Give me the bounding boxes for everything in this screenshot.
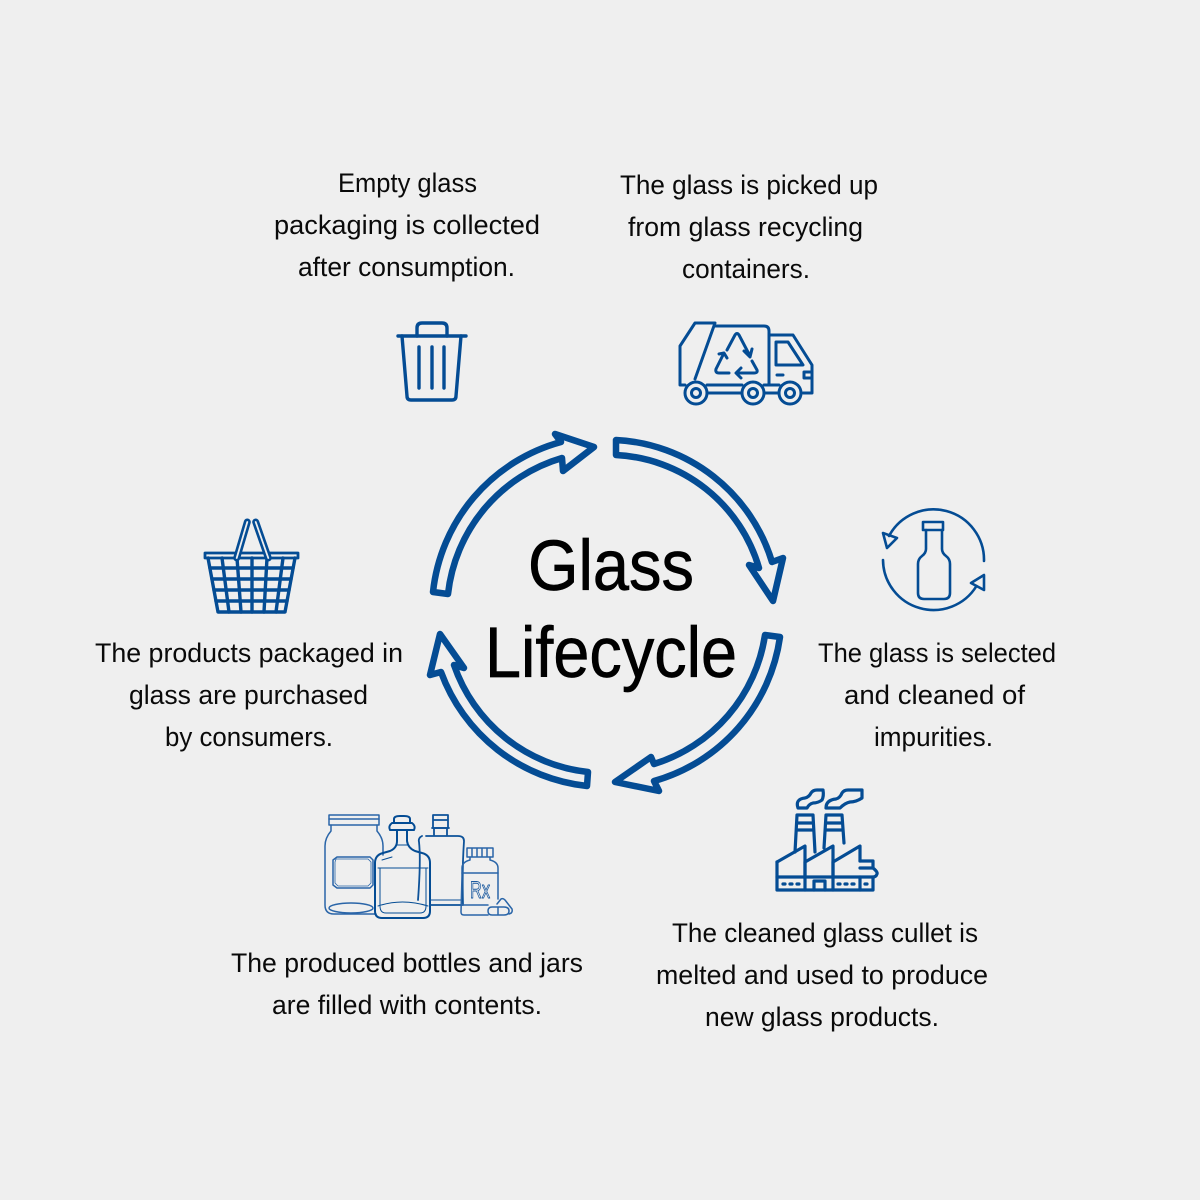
icon: jars and bottles [325, 815, 512, 918]
jar [325, 815, 383, 914]
title [485, 527, 737, 693]
icon: factory [777, 790, 877, 890]
text: step 2 pick up: The glass is picked up [620, 170, 878, 200]
text: step 5 filled: are filled with contents. [272, 990, 542, 1020]
arrow: bottom to left [430, 634, 588, 786]
text: step 1 collected: after consumption. [298, 252, 515, 282]
text: step 2 pick up [620, 170, 878, 284]
text: step 4 melted: The cleaned glass cullet is [672, 918, 978, 948]
icon: recycling truck [680, 323, 812, 404]
text: step 4 melted [656, 918, 988, 1032]
cycle arrows [430, 434, 783, 791]
icon: bottle in cycle [883, 509, 984, 610]
text: step 2 pick up: containers. [682, 254, 810, 284]
title: Lifecycle [485, 614, 737, 693]
arrow: left to top [433, 434, 594, 594]
text: step 3 selected: The glass is selected [818, 638, 1056, 668]
text: step 5 filled [231, 948, 583, 1020]
pill bottle [461, 848, 512, 915]
text: step 3 selected: impurities. [874, 722, 993, 752]
text: step 1 collected: packaging is collected [274, 210, 540, 240]
arrow: right to bottom [615, 635, 780, 791]
text: step 1 collected [274, 168, 540, 282]
label: Rx: Rx [470, 877, 490, 904]
text: step 4 melted: melted and used to produce [656, 960, 988, 990]
text: step 2 pick up: from glass recycling [628, 212, 863, 242]
text: step 6 purchased: by consumers. [165, 722, 333, 752]
text: step 6 purchased: The products packaged in [95, 638, 403, 668]
text: step 6 purchased [95, 638, 403, 752]
arrow: top to right [616, 440, 783, 601]
title: Glass [528, 527, 694, 606]
flat bottle [418, 815, 464, 905]
text: step 3 selected [818, 638, 1056, 752]
icon: shopping basket [205, 522, 298, 612]
basket handles [237, 522, 268, 558]
text: step 5 filled: The produced bottles and jars [231, 948, 583, 978]
text: step 1 collected: Empty glass [338, 168, 477, 198]
text: step 4 melted: new glass products. [705, 1002, 939, 1032]
decanter bottle [375, 816, 430, 918]
text: step 3 selected: and cleaned of [844, 680, 1026, 710]
icon: trash bin [398, 323, 466, 400]
text: step 6 purchased: glass are purchased [129, 680, 368, 710]
